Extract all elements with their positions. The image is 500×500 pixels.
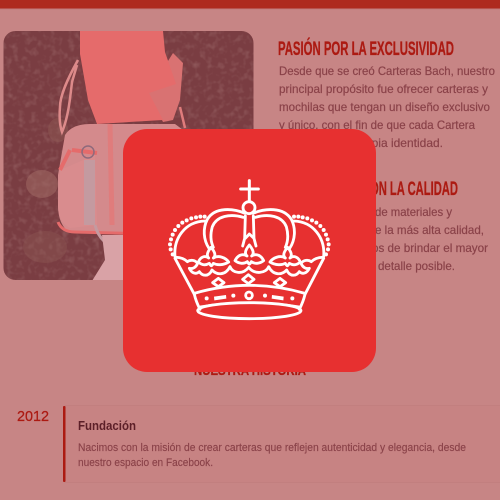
text block: calidad paragraph: de materiales y	[375, 205, 452, 219]
top bar	[0, 0, 500, 10]
cross	[241, 181, 258, 201]
text block: calidad paragraph: os de brindar el mayor	[372, 241, 488, 255]
text block: exclusividad paragraph: tenga su propia identidad.	[305, 136, 443, 150]
fleurons	[235, 245, 264, 264]
entry description	[78, 442, 466, 469]
text block: exclusividad paragraph: mochilas que tengan un diseño exclusivo	[279, 100, 490, 114]
icon: royal crown	[168, 181, 331, 319]
central strap	[243, 216, 256, 246]
crown band	[175, 258, 324, 294]
heading: nuestra historia: NUESTRA HISTORIA	[194, 362, 306, 378]
entry description: Nacimos con la misión de crear carteras que reflejen autenticidad y elegancia, desde	[78, 442, 466, 454]
entry title: Fundación	[78, 418, 136, 433]
text block: exclusividad paragraph: principal propósito fue ofrecer carteras y	[279, 82, 488, 96]
year: 2012	[17, 408, 49, 425]
text block: calidad paragraph: detalle posible.	[378, 259, 455, 273]
crown arches	[204, 210, 245, 248]
diamonds	[213, 278, 224, 287]
text block: exclusividad paragraph	[279, 64, 495, 150]
pearls	[168, 215, 331, 256]
text block: calidad paragraph	[372, 205, 488, 273]
entry card	[63, 406, 500, 482]
photo: person carrying a bag in front of foliage	[3, 31, 254, 281]
text block: exclusividad paragraph: y único, con el fin de que cada Cartera	[279, 118, 475, 132]
logo card	[123, 129, 376, 372]
entry description: nuestro espacio en Facebook.	[78, 457, 213, 469]
text block: calidad paragraph: e la más alta calidad,	[375, 223, 484, 237]
timeline entry: 2012	[17, 406, 500, 482]
orb	[243, 202, 255, 214]
text block: exclusividad paragraph: Desde que se creó Carteras Bach, nuestro	[279, 64, 495, 78]
